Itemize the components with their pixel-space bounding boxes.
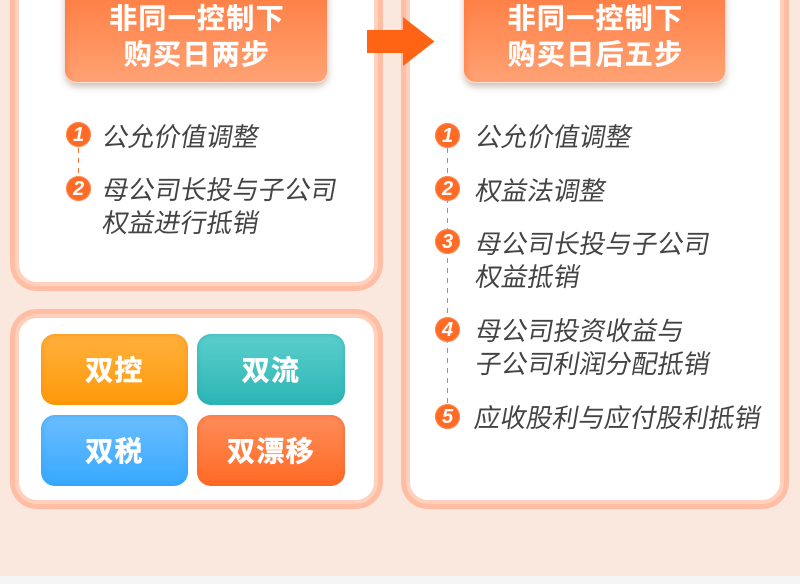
- tag: teal: [197, 334, 345, 405]
- heading: left card: 购买日两步: [124, 39, 270, 70]
- panel: left process: [15, 0, 378, 286]
- step 3 text: [473, 229, 712, 292]
- step 1 text: 公允价值调整: [473, 122, 634, 152]
- tag: red-orange: [197, 415, 345, 486]
- step 2 text: 权益法调整: [473, 176, 608, 206]
- step 5 number: 5: [442, 406, 453, 428]
- step 3 text: 母公司长投与子公司: [473, 229, 712, 259]
- bottom strip: [0, 576, 800, 584]
- step 5 number: [435, 404, 460, 429]
- step 4 text: 子公司利润分配抵销: [473, 349, 712, 379]
- arrow: [367, 17, 434, 66]
- step 1 text: 公允价值调整: [100, 122, 261, 152]
- heading: right card: 购买日后五步: [508, 39, 683, 70]
- step 2 number: 2: [73, 178, 84, 200]
- panel: right process: [406, 0, 784, 504]
- step 1 number: [66, 122, 91, 147]
- step 3 number: 3: [442, 231, 453, 253]
- step 3 number: [435, 229, 460, 254]
- tag: blue: 双税: [85, 436, 144, 467]
- step 4 number: [435, 317, 460, 342]
- heading: left card: [65, 0, 328, 83]
- step 1 number: 1: [73, 124, 84, 146]
- step 1 number: 1: [442, 125, 453, 147]
- step 4 text: 母公司投资收益与: [473, 316, 686, 346]
- step 4 number: 4: [442, 319, 453, 341]
- step 2 number: [435, 176, 460, 201]
- tag: orange: [41, 334, 188, 405]
- panel: double tags: [15, 314, 378, 504]
- heading: right card: [464, 0, 726, 83]
- step 2 text: [100, 175, 339, 238]
- step 3 text: 权益抵销: [473, 262, 582, 292]
- tag: red-orange: 双漂移: [227, 436, 315, 467]
- step 1 number: [435, 123, 460, 148]
- right steps: [435, 122, 763, 433]
- step 2 text: 母公司长投与子公司: [100, 175, 339, 205]
- tag: orange: 双控: [85, 355, 144, 386]
- heading: right card: 非同一控制下: [508, 3, 683, 34]
- step 2 text: 权益进行抵销: [100, 208, 261, 238]
- heading: left card: 非同一控制下: [109, 3, 285, 34]
- step 2 number: [66, 176, 91, 201]
- step 2 number: 2: [442, 178, 453, 200]
- step 4 text: [473, 316, 712, 379]
- step 5 text: 应收股利与应付股利抵销: [472, 403, 763, 433]
- tag: teal: 双流: [242, 355, 300, 386]
- left steps: [66, 122, 339, 238]
- tag: blue: [41, 415, 188, 486]
